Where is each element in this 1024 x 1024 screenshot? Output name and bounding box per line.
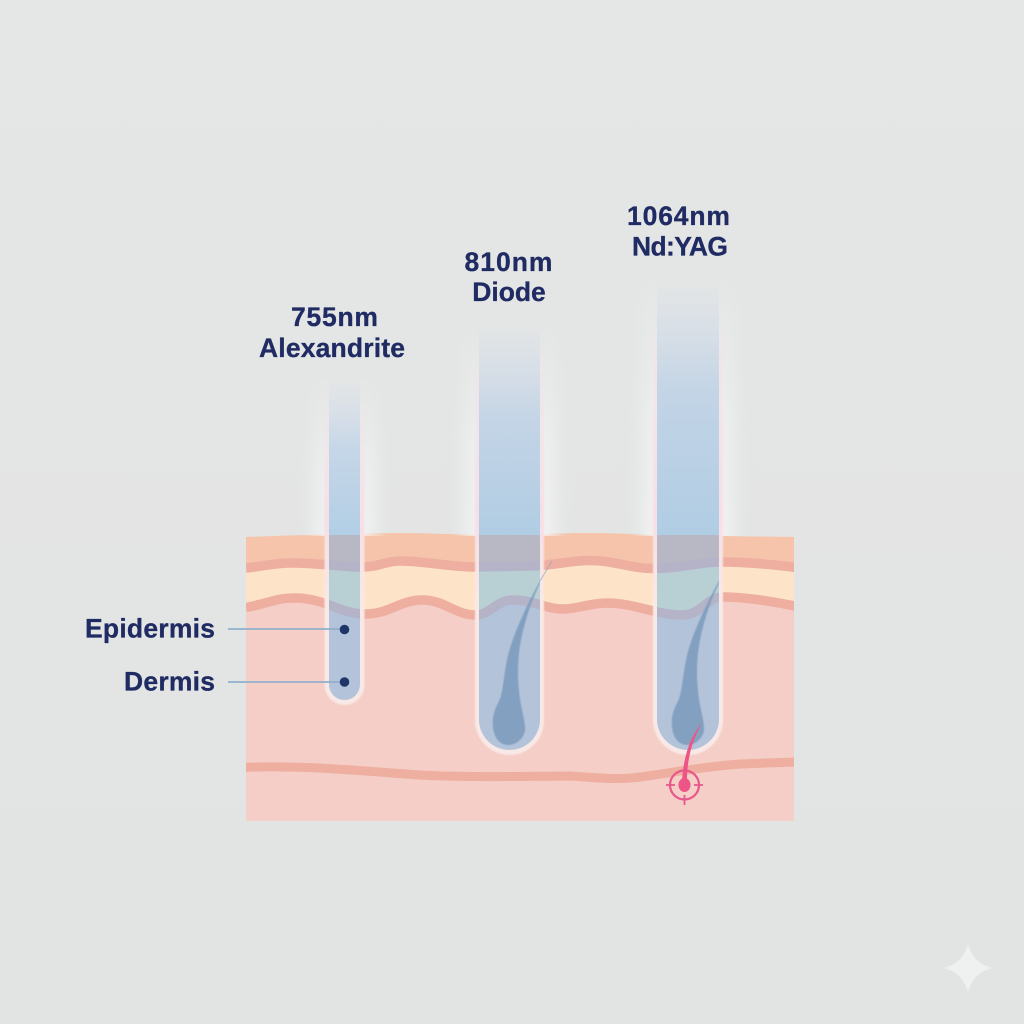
beam over lower line (246, 597, 800, 615)
target ring (670, 770, 699, 800)
beam wall 1064nm (653, 295, 723, 755)
label: 755nm Alexandrite (259, 302, 405, 363)
leader line epidermis (228, 628, 341, 630)
target crosshair (666, 785, 703, 805)
beam over epidermis (329, 535, 719, 564)
epidermis peach layer (246, 533, 794, 564)
skin cross-section (240, 530, 800, 830)
label: Epidermis: Epidermis (85, 614, 215, 644)
cream layer (246, 565, 794, 610)
label: Dermis: Dermis (124, 666, 215, 696)
pink energy trail (682, 723, 702, 780)
label: 810nm Diode: Diode (472, 277, 546, 307)
beam light 1064nm (657, 280, 719, 537)
marker dot dermis (340, 677, 349, 687)
target follicle marker (666, 723, 703, 805)
label: 1064nm Nd:YAG (627, 201, 730, 262)
deep tissue line (240, 762, 800, 779)
beam halo 755nm (306, 454, 384, 536)
beam light 755nm (329, 380, 360, 537)
lower skin boundary line (246, 597, 800, 615)
beam halo 810nm (456, 426, 564, 536)
target bulb (678, 778, 690, 792)
beam over cream layer (329, 566, 719, 610)
label: 755nm Alexandrite: 755nm (291, 302, 378, 332)
label: 1064nm Nd:YAG: 1064nm (627, 201, 730, 231)
dermis layer (246, 597, 800, 830)
beams inside skin (329, 535, 719, 750)
beam over upper line (246, 560, 800, 568)
leader line dermis (228, 681, 341, 683)
beam light 810nm (479, 325, 540, 537)
label: 1064nm Nd:YAG: Nd:YAG (632, 232, 728, 262)
marker dot epidermis (340, 625, 349, 634)
beam over dermis (329, 602, 719, 750)
label: 755nm Alexandrite: Alexandrite (259, 333, 405, 363)
icon: sparkle (943, 943, 993, 993)
beam wall 810nm (475, 340, 544, 755)
hair follicle in 1064nm beam (671, 580, 719, 746)
hair tip beyond 810nm beam (540, 561, 552, 581)
label: 810nm Diode (464, 247, 552, 307)
hair follicle in 810nm beam (492, 580, 540, 746)
beam halo 1064nm (634, 398, 732, 536)
upper skin boundary line (246, 560, 800, 568)
label: 810nm Diode: 810nm (464, 247, 552, 277)
beam wall 755nm (324, 390, 364, 705)
